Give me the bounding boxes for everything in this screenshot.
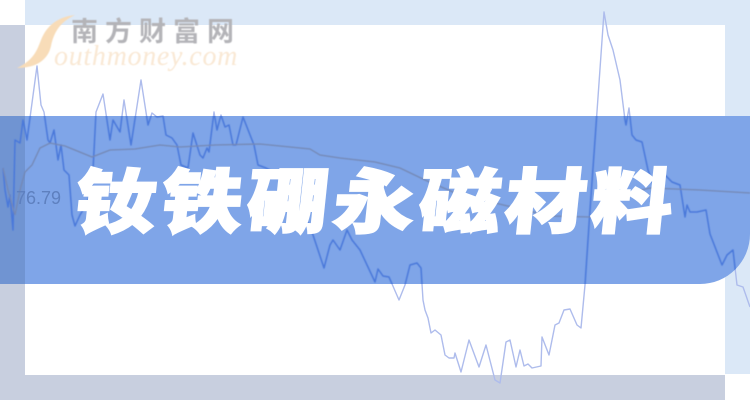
title: 材 [501, 164, 591, 243]
title: 磁 [415, 164, 505, 243]
moving average line [3, 143, 750, 217]
watermark url: outhmoney.com [54, 41, 238, 72]
title: 铁 [157, 164, 247, 243]
line chart: dark portion inside band [2, 116, 750, 284]
watermark chinese name: 南方财富网 [71, 16, 241, 47]
axis value label: 76.79 [16, 188, 61, 208]
watermark: southmoney logo [17, 15, 241, 72]
icon: orange swoosh [17, 15, 75, 68]
title: 料 [587, 164, 677, 243]
title band [0, 116, 750, 284]
title: 永 [329, 164, 419, 243]
title: 钕 [71, 164, 161, 243]
title [71, 164, 677, 243]
title: 硼 [243, 164, 333, 243]
